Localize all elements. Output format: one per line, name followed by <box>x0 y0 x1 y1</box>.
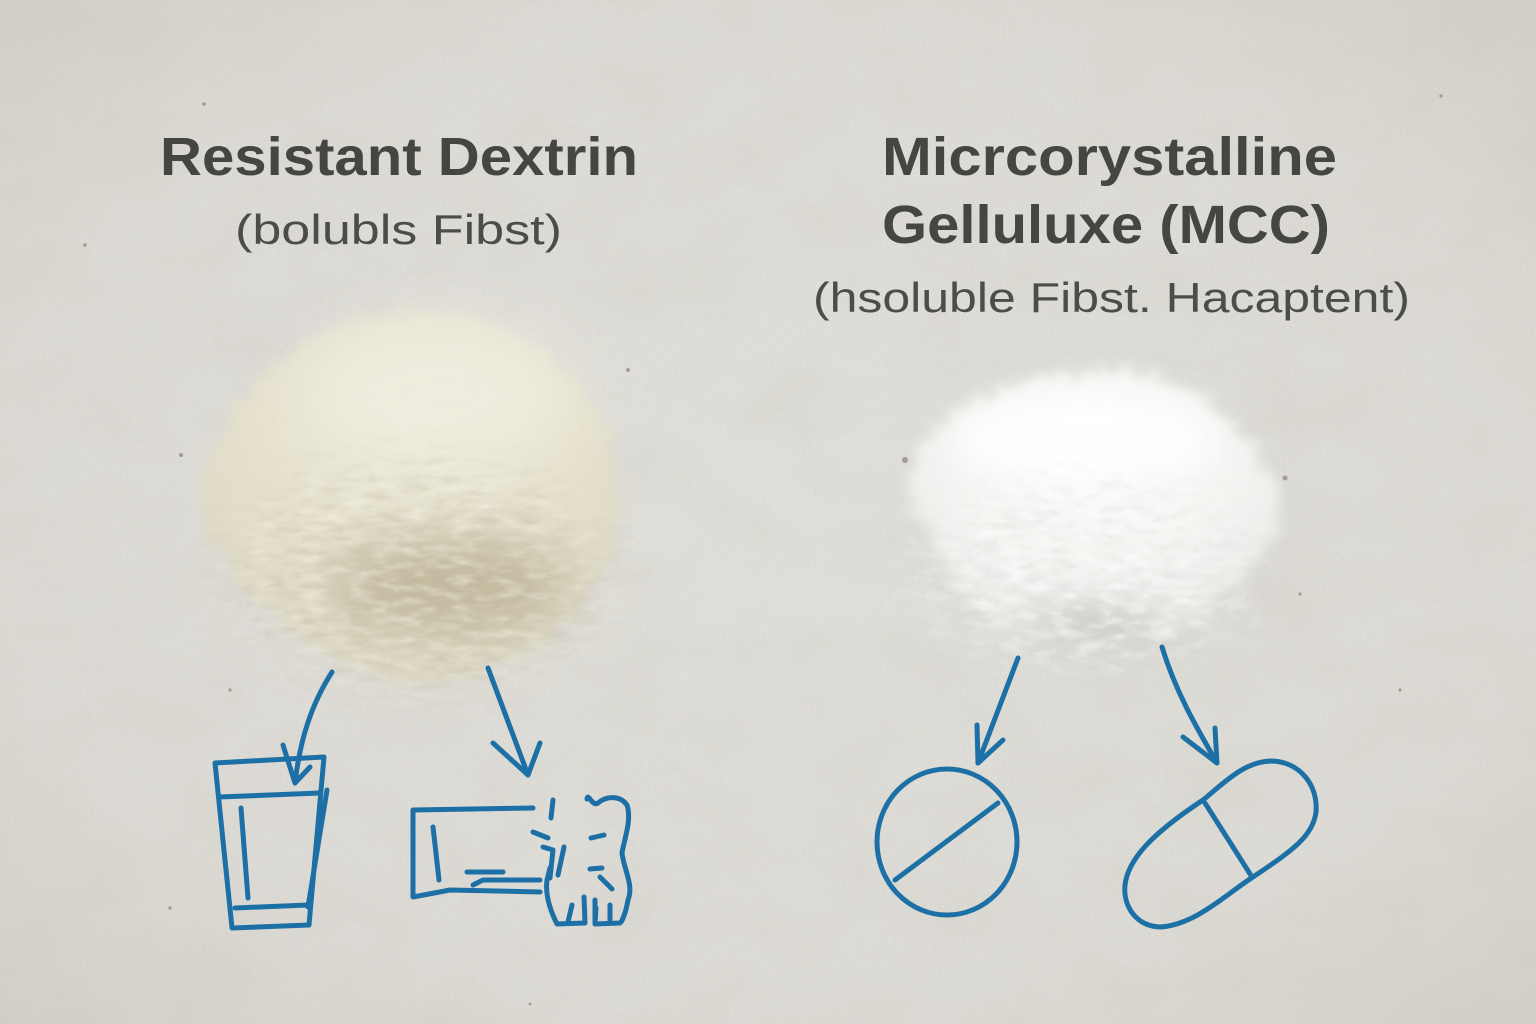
heading: microcrystalline cellulose: Gelluluxe (MCC) <box>882 195 1330 255</box>
icon: capsule <box>1125 761 1316 927</box>
heading: microcrystalline cellulose: Micrcorystalline <box>882 127 1337 187</box>
powder pile: cream <box>202 308 622 690</box>
arrow: to tablet <box>977 658 1018 763</box>
arrow: to capsule <box>1162 647 1217 763</box>
subheading: soluble fibre: (bolubls Fibst) <box>235 206 562 253</box>
powder pile: white <box>906 363 1282 668</box>
icon: glass of water <box>215 757 327 928</box>
heading: microcrystalline cellulose <box>882 127 1337 255</box>
icon: tablet <box>877 769 1017 915</box>
icon: torn snack packet <box>413 797 630 924</box>
subheading: insoluble fibre excipient: (hsoluble Fibst. Hacaptent) <box>813 274 1410 321</box>
arrow: to snack bar <box>488 668 540 775</box>
panel: resistant dextrin <box>164 136 634 930</box>
panel: microcrystalline cellulose <box>813 127 1410 927</box>
heading: resistant dextrin: Resistant Dextrin <box>160 127 638 187</box>
arrow: to drink <box>283 672 332 783</box>
